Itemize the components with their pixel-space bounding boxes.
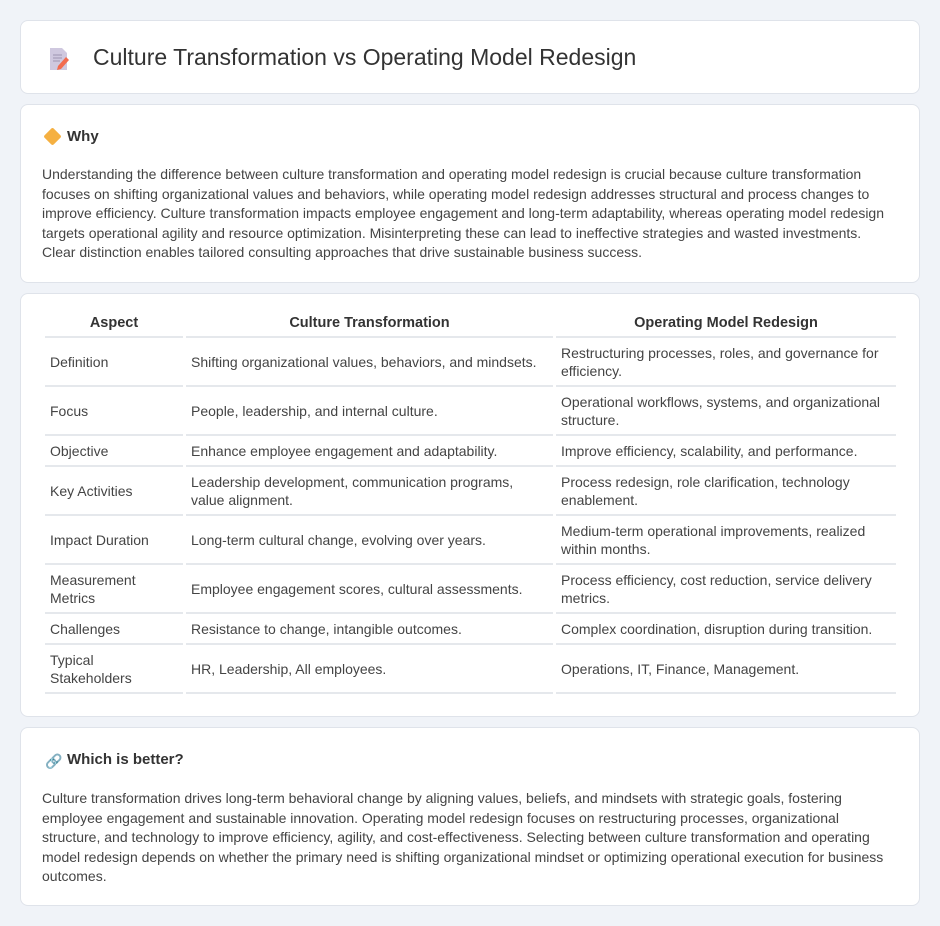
table: Culture Transformation: [289, 315, 450, 331]
table: Improve efficiency, scalability, and performance.: [561, 442, 857, 458]
text: which is better: Culture transformation drives long-term behavioral change by aligning values, beliefs, and mindsets with strategic goals, fostering employee engagement and sustainable innovation. Operating model redesign focuses on restructuring processes, organizational structure, and technology to improve efficiency, agility, and cost-effectiveness. Selecting between culture transformation and operating model redesign depends on whether the primary need is shifting organizational mindset or optimizing operational execution for business outcomes.: [42, 790, 883, 884]
panel: comparison table: [20, 293, 920, 717]
heading: which is better: Which is better?: [67, 751, 184, 768]
table: [45, 315, 896, 694]
table: Definition: [50, 354, 108, 370]
table: Operations, IT, Finance, Management.: [561, 660, 799, 676]
text: why: Understanding the difference between culture transformation and operating model redesign is crucial because culture transformation focuses on shifting organizational values and behaviors, while operating model redesign addresses structural and process changes to improve efficiency. Culture transformation impacts employee engagement and long-term adaptability, whereas operating model redesign targets operational agility and resource optimization. Misinterpreting these can lead to ineffective strategies and wasted investments. Clear distinction enables tailored consulting approaches that drive sustainable business success.: [42, 166, 884, 260]
table: Operational workflows, systems, and organizational structure.: [561, 394, 880, 428]
panel: why: [20, 104, 920, 283]
table: Operating Model Redesign: [634, 315, 818, 331]
title: Culture Transformation vs Operating Model Redesign: [93, 44, 636, 70]
table: Objective: [50, 442, 108, 458]
table: Enhance employee engagement and adaptability.: [191, 442, 497, 458]
table: Employee engagement scores, cultural assessments.: [191, 580, 522, 596]
table: Process efficiency, cost reduction, service delivery metrics.: [561, 572, 872, 606]
icon: diamond: [43, 127, 62, 146]
table: Stakeholders: [50, 670, 132, 686]
icon: document: [50, 48, 69, 70]
table: Typical: [50, 652, 94, 668]
table: Leadership development, communication programs, value alignment.: [191, 474, 513, 508]
table: Restructuring processes, roles, and governance for efficiency.: [561, 344, 878, 378]
header card: [20, 20, 920, 94]
table: Resistance to change, intangible outcomes.: [191, 620, 462, 636]
table: Long-term cultural change, evolving over years.: [191, 532, 486, 548]
table: HR, Leadership, All employees.: [191, 660, 386, 676]
table: Shifting organizational values, behaviors, and mindsets.: [191, 354, 537, 370]
table: Focus: [50, 402, 88, 418]
table: Challenges: [50, 620, 120, 636]
table: Aspect: [90, 315, 138, 331]
panel: which is better: [20, 727, 920, 906]
heading: why: Why: [67, 128, 99, 145]
table: Medium-term operational improvements, realized within months.: [561, 522, 865, 556]
table: Process redesign, role clarification, technology enablement.: [561, 474, 850, 508]
table: Impact Duration: [50, 532, 149, 548]
table: People, leadership, and internal culture.: [191, 402, 438, 418]
table: Key Activities: [50, 482, 132, 498]
table: Measurement Metrics: [50, 572, 136, 606]
table: Complex coordination, disruption during transition.: [561, 620, 872, 636]
icon: link: 🔗: [45, 753, 62, 769]
